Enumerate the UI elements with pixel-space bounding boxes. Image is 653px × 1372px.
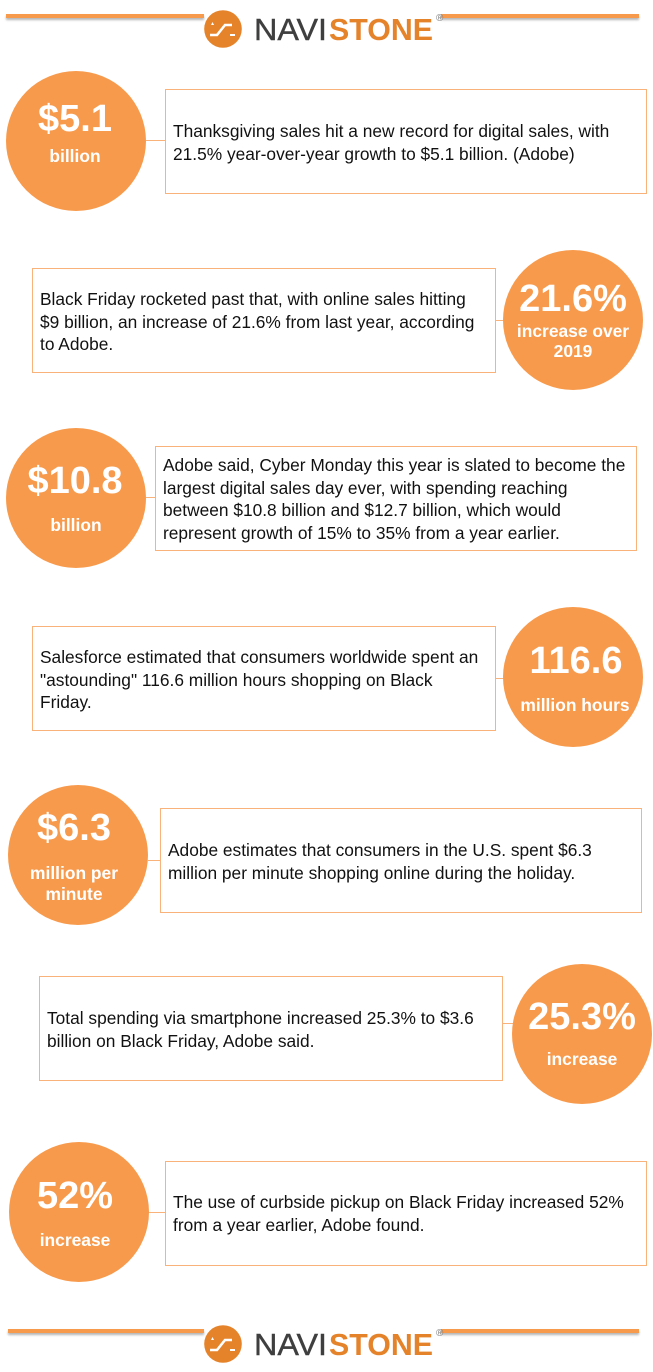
stat circle: 52% increase (9, 1142, 149, 1282)
text box: Black Friday: $9 billion, an increase of 21.6% from last year, according (40, 312, 474, 332)
text box: Salesforce: Friday. (40, 692, 92, 712)
icon: escalator logo (204, 10, 242, 48)
wordmark: NAVI (254, 12, 327, 47)
text box: Thanksgiving: 21.5% year-over-year growth to $5.1 billion. (Adobe) (173, 144, 575, 164)
stat circle: 116.6 million hours (503, 607, 643, 747)
stat circle: 21.6%: increase over (517, 321, 629, 341)
text box: curbside: The use of curbside pickup on Black Friday increased 52% (173, 1192, 624, 1212)
stat circle: 52% increase: increase (40, 1230, 110, 1250)
footer logo (6, 1325, 640, 1363)
stat circle: 21.6%: 2019 (554, 341, 592, 361)
text box: Salesforce: Salesforce estimated that consumers worldwide spent an (40, 647, 478, 667)
wordmark: NAVI (254, 1327, 327, 1362)
panel: Salesforce (32, 607, 643, 747)
wordmark: STONE (329, 1327, 433, 1362)
text box: Cyber Monday (155, 446, 637, 551)
wordmark (254, 1327, 444, 1362)
stat circle: $6.3 million per minute: minute (45, 884, 102, 904)
panel: Cyber Monday (6, 428, 637, 568)
panel: Thanksgiving (6, 71, 647, 211)
wordmark (254, 12, 444, 47)
text box: Black Friday: to Adobe. (40, 334, 113, 354)
text box: curbside (165, 1161, 647, 1266)
text box: per minute: Adobe estimates that consumers in the U.S. spent $6.3 (168, 840, 592, 860)
wordmark: ® (436, 1328, 444, 1339)
stat circle: $10.8 billion: billion (50, 515, 102, 535)
panel: per minute (8, 785, 642, 925)
stat circle: 116.6 million hours: 116.6 (530, 640, 622, 682)
icon: escalator logo (204, 1325, 242, 1363)
stat circle: $6.3 million per minute: $6.3 (37, 807, 111, 849)
text box: Salesforce (32, 626, 496, 731)
text box: smartphone: billion on Black Friday, Adobe said. (47, 1030, 314, 1050)
text box: Black Friday: Black Friday rocketed past that, with online sales hitting (40, 289, 466, 309)
stat circle: $5.1 billion: $5.1 (38, 98, 112, 140)
panel: curbside (9, 1142, 647, 1282)
text box: Thanksgiving (165, 89, 647, 194)
stat circle: 116.6 million hours: million hours (520, 695, 630, 715)
text box: Black Friday (32, 268, 496, 373)
text box: smartphone: Total spending via smartphone increased 25.3% to $3.6 (47, 1008, 474, 1028)
text box: Cyber Monday: represent growth of 15% to 35% from a year earlier. (163, 522, 560, 542)
text box: Thanksgiving: Thanksgiving sales hit a new record for digital sales, with (173, 121, 609, 141)
stat circle: $10.8 billion (6, 428, 146, 568)
stat circle: 25.3% increase (512, 964, 652, 1104)
panel: smartphone (39, 964, 652, 1104)
text box: smartphone (39, 976, 503, 1081)
stat circle: $5.1 billion: billion (49, 146, 101, 166)
panel: Black Friday (32, 250, 643, 390)
stat circle: 52% increase: 52% (37, 1175, 113, 1217)
text box: per minute (160, 808, 642, 913)
text box: Cyber Monday: between $10.8 billion and $12.7 billion, which would (163, 500, 561, 520)
stat circle: 21.6%: 21.6% (519, 278, 627, 320)
stat circle: 25.3% increase: 25.3% (528, 996, 636, 1038)
text box: curbside: from a year earlier, Adobe found. (173, 1214, 424, 1234)
stat circle: $5.1 billion (6, 71, 146, 211)
header logo (4, 10, 640, 48)
stat circle: $6.3 million per minute: million per (30, 863, 118, 883)
text box: per minute: million per minute shopping online during the holiday. (168, 862, 575, 882)
text box: Cyber Monday: largest digital sales day ever, with spending reaching (163, 478, 568, 498)
text box: Cyber Monday: Adobe said, Cyber Monday this year is slated to become the (163, 455, 625, 475)
stat circle: $10.8 billion: $10.8 (27, 460, 123, 502)
wordmark: STONE (329, 12, 433, 47)
wordmark: ® (436, 13, 444, 24)
stat circle: 25.3% increase: increase (547, 1049, 617, 1069)
stat circle: $6.3 million per minute (8, 785, 148, 925)
text box: Salesforce: "astounding" 116.6 million hours shopping on Black (40, 670, 432, 690)
stat circle: 21.6% (503, 250, 643, 390)
